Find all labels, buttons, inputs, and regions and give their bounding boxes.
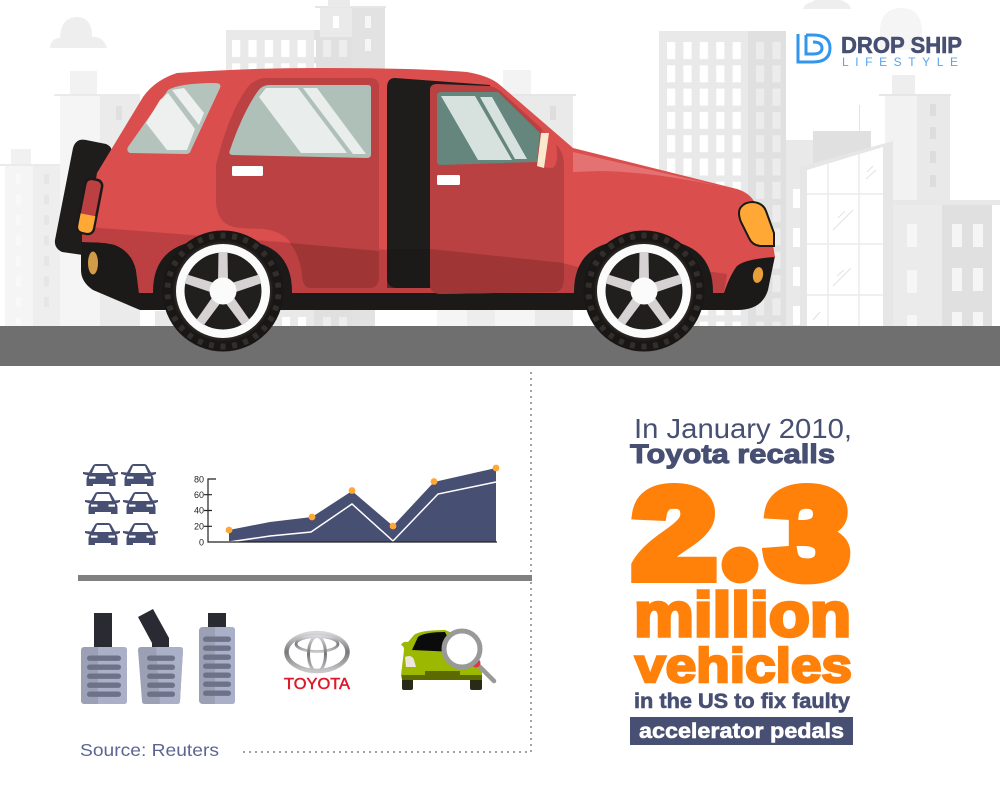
spare wheel cover [55, 140, 111, 256]
pedal three [199, 613, 235, 704]
building right tall [879, 75, 951, 205]
logo tagline: LIFESTYLE [842, 55, 958, 69]
dotted frame [243, 372, 531, 752]
2.3 [633, 464, 849, 604]
chart axis labels: 80 [194, 474, 204, 484]
car shell [401, 630, 482, 680]
icon: green car under magnifier [401, 630, 494, 690]
tower with windows [659, 31, 786, 326]
chart data points [226, 465, 499, 533]
lower body shade [82, 227, 727, 293]
red car [55, 68, 775, 352]
logo: Drop Ship Lifestyle [798, 32, 962, 69]
front wheel arch [153, 240, 292, 310]
icon: pedals [81, 609, 235, 704]
headlight [739, 202, 774, 246]
area chart [194, 465, 499, 548]
dome and cloud right [880, 8, 922, 50]
headlight [405, 656, 416, 667]
front wheel [584, 230, 704, 352]
rear door panel [216, 78, 379, 288]
chart area [229, 468, 496, 542]
road [0, 326, 1000, 366]
logo wordmark: DROP SHIP [841, 32, 962, 58]
chart axis labels: 20 [194, 522, 204, 532]
pedal one [81, 613, 127, 704]
hood highlight [573, 152, 737, 190]
windscreen [412, 632, 455, 652]
front door handle [437, 175, 460, 185]
car body [82, 68, 775, 293]
accelerator pedals banner [630, 717, 853, 745]
glass tower [800, 141, 893, 326]
source: Source: Reuters [80, 740, 219, 760]
door opening [387, 78, 490, 288]
logo wordmark: TOYOTA [284, 676, 351, 693]
logo emblem [286, 633, 348, 672]
logo icon [798, 34, 830, 62]
building far left [0, 149, 62, 326]
building behind car left [155, 0, 386, 326]
rear quarter window [127, 83, 220, 154]
2.3: 3 [766, 464, 849, 604]
chart white line [229, 482, 496, 542]
accelerator pedals banner: accelerator pedals [639, 720, 844, 743]
front bumper indicator [752, 266, 764, 284]
building behind glass tower [786, 105, 871, 326]
rear wheel [162, 230, 284, 352]
chart axes [204, 479, 497, 542]
building ground mid [437, 70, 576, 326]
intro line: In January 2010, [634, 413, 852, 444]
in the US: in the US to fix faulty [634, 690, 850, 713]
rear bumper indicator [88, 252, 98, 274]
side mirror [538, 130, 557, 168]
chart axis labels: 60 [194, 490, 204, 500]
Toyota logo [284, 633, 351, 693]
divider bar [78, 575, 532, 581]
chart axis labels: 0 [199, 538, 204, 548]
2.3: . [719, 464, 760, 604]
rear tail light [76, 178, 103, 235]
front door window [437, 92, 540, 165]
city skyline background [0, 0, 1000, 326]
headline text block [630, 413, 853, 745]
car icons group [83, 464, 158, 545]
front door [430, 84, 564, 294]
building left tall [54, 71, 140, 326]
chart axis labels: 40 [194, 506, 204, 516]
2.3: 2 [633, 464, 716, 604]
building right low [885, 200, 1000, 326]
magnifier [444, 631, 494, 681]
lower black chassis [81, 242, 775, 310]
chart axis labels [194, 474, 204, 548]
vehicles: vehicles [635, 640, 852, 693]
rear door handle [232, 166, 263, 176]
wheels [402, 676, 413, 690]
grille [402, 671, 482, 680]
million: million [634, 581, 851, 650]
rear door window [229, 85, 371, 158]
cloud left [50, 17, 107, 48]
Toyota recalls: Toyota recalls [630, 439, 835, 469]
pedal two [138, 609, 183, 704]
